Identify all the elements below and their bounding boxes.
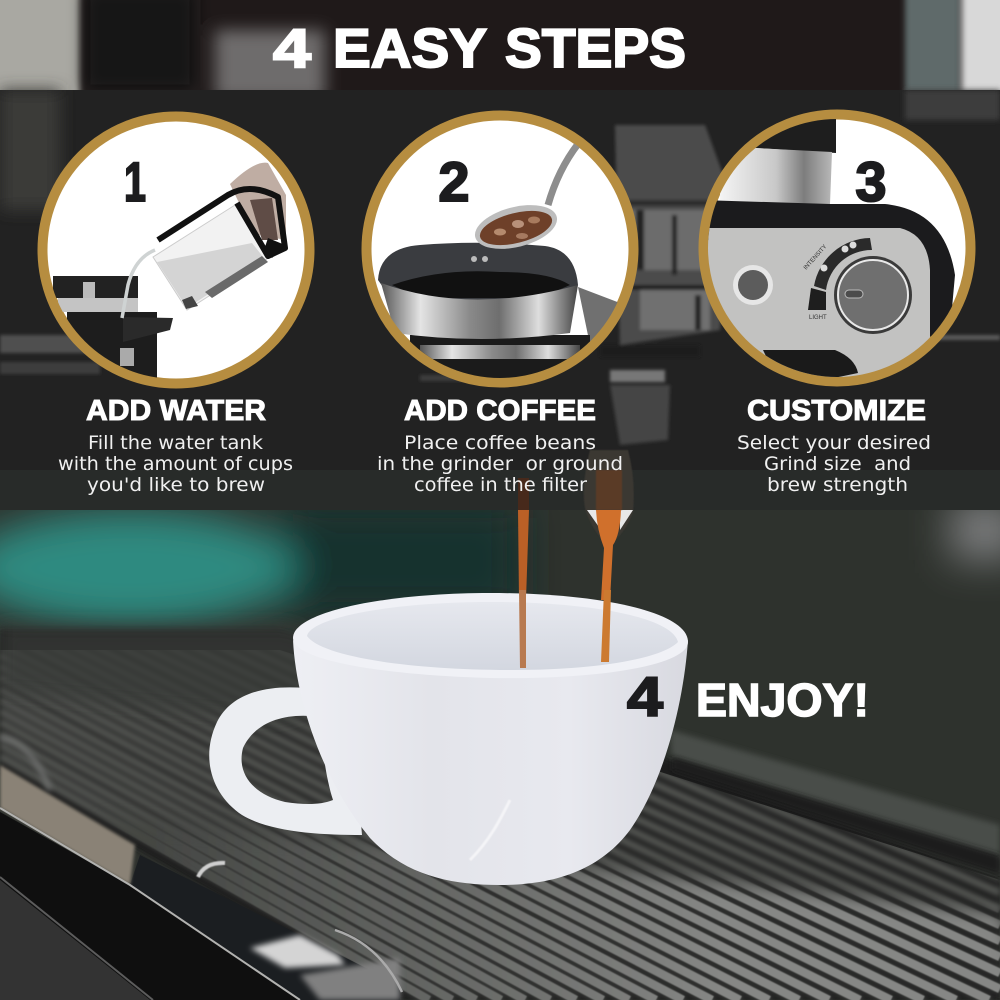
grinder	[378, 242, 618, 378]
step 4: enjoy	[627, 665, 869, 728]
dark translucent band behind steps	[0, 90, 1000, 510]
blurred machine details	[0, 125, 1000, 445]
intensity dial	[803, 238, 912, 334]
step 4: enjoy: 4	[627, 665, 663, 728]
step 1 caption	[58, 395, 293, 496]
step 2 caption: ADD COFFEE	[404, 395, 596, 427]
teal cloth	[0, 500, 1000, 626]
button	[733, 265, 773, 305]
step 1 caption: with the amount of cups	[58, 453, 293, 475]
step 1 caption: you'd like to brew	[87, 474, 265, 496]
step 2 caption: coffee in the filter	[414, 474, 587, 496]
title: EASY	[333, 17, 487, 79]
step 1 circle: add water	[42, 116, 310, 384]
water pour	[122, 250, 155, 318]
white cup	[209, 590, 688, 885]
coffee machine base	[53, 276, 173, 382]
step 2 caption: in the grinder or ground	[377, 453, 623, 475]
glass carafe	[153, 205, 270, 310]
number 3: 3	[855, 150, 887, 213]
step 2 caption: Place coffee beans	[404, 432, 596, 454]
cup handle	[209, 687, 362, 835]
front metal tray edge	[0, 738, 402, 1000]
number 1: 1	[124, 150, 146, 213]
hand	[230, 163, 286, 240]
top strip of the photo	[0, 0, 1000, 100]
step 3 caption: CUSTOMIZE	[747, 395, 926, 427]
step 3 caption: brew strength	[767, 474, 908, 496]
carafe handle	[158, 189, 285, 256]
step 3 caption	[737, 395, 931, 496]
step 3 caption: Select your desired	[737, 432, 931, 454]
grill tray	[0, 620, 1000, 1000]
machine top	[720, 119, 836, 204]
step 1 caption: ADD WATER	[86, 395, 266, 427]
lower wall	[0, 510, 1000, 810]
title	[273, 17, 686, 79]
spoon with beans	[470, 144, 578, 257]
step 3 caption: Grind size and	[764, 453, 911, 475]
number 2: 2	[438, 150, 470, 213]
cup body	[293, 640, 688, 885]
bottom slot	[763, 350, 858, 377]
step 2 caption	[377, 395, 623, 496]
steel panel	[700, 228, 930, 385]
step 2 circle: add coffee	[366, 116, 634, 390]
intensity dial: LIGHT	[809, 315, 827, 321]
step 3 circle: customize	[700, 105, 970, 385]
title: 4	[273, 17, 312, 79]
rear ledge	[670, 730, 1000, 860]
step 1 caption: Fill the water tank	[88, 432, 263, 454]
coffee spout and streams	[518, 450, 634, 600]
title: STEPS	[505, 17, 686, 79]
intensity dial: INTENSITY	[803, 244, 828, 271]
cup rim and interior	[293, 593, 688, 678]
black arch	[700, 200, 955, 340]
step 4: enjoy: ENJOY!	[696, 674, 869, 726]
